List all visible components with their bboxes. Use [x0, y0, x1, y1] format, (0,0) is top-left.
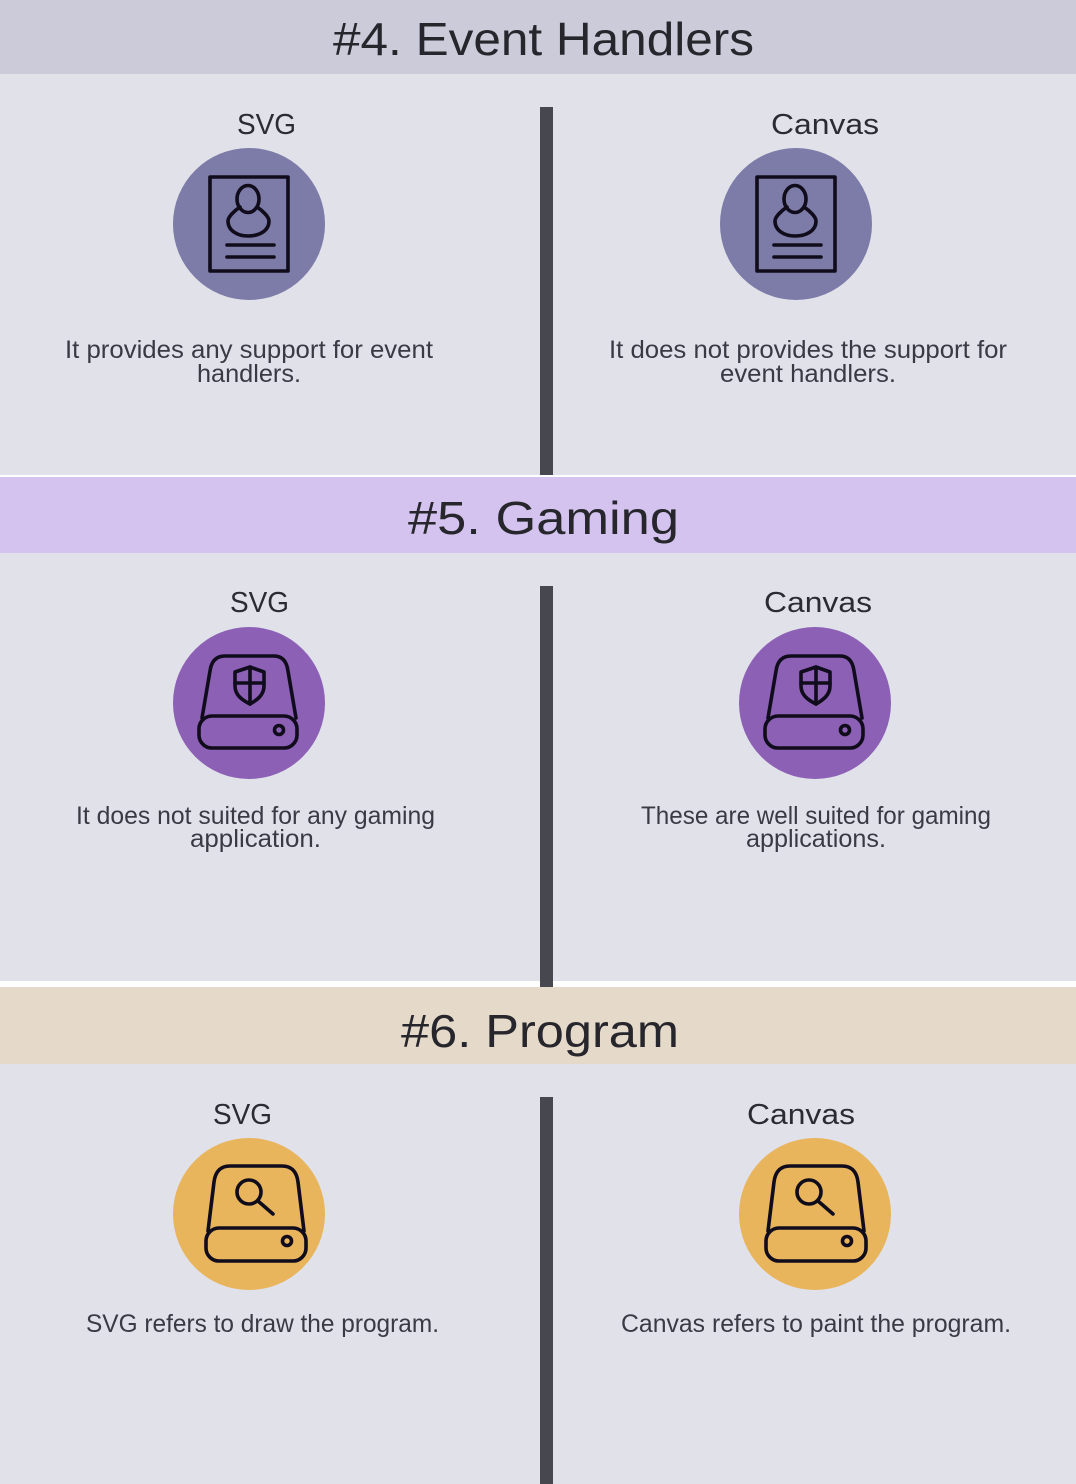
heading: #6. Program: #6. Program: [401, 1005, 679, 1057]
icon: shield drive, Canvas: [739, 627, 891, 779]
text: Canvas event handlers: It does not provides the support for: [609, 336, 1007, 364]
icon: shield drive, SVG: [173, 627, 325, 779]
label: Canvas: Canvas: [764, 587, 872, 619]
heading: #4. Event Handlers: #4. Event Handlers: [333, 13, 754, 65]
text: SVG gaming: application.: [190, 825, 321, 853]
heading: #5. Gaming: #5. Gaming: [408, 492, 679, 544]
section divider gaps: [0, 475, 1076, 987]
text: SVG event handlers: It provides any support for event: [65, 336, 433, 364]
label: SVG: SVG: [237, 109, 296, 141]
heading band: #4: [0, 0, 1076, 74]
column divider: [540, 586, 553, 987]
icon: search drive, Canvas: [739, 1138, 891, 1290]
panel: section 5 gaming: [0, 477, 1076, 987]
text: SVG program: SVG refers to draw the program.: [86, 1310, 439, 1338]
text: SVG event handlers: handlers.: [197, 360, 301, 388]
icon: profile document, SVG: [173, 148, 325, 300]
panel: section 6 program: [0, 987, 1076, 1484]
text: Canvas gaming: These are well suited for gaming: [641, 802, 991, 830]
column divider: [540, 1097, 553, 1484]
text: Canvas gaming: [641, 802, 991, 853]
label: SVG: SVG: [213, 1099, 272, 1131]
icon: search drive, SVG: [173, 1138, 325, 1290]
label: Canvas: Canvas: [771, 109, 879, 141]
panel: section 4 event handlers: [0, 0, 1076, 475]
text: SVG gaming: It does not suited for any gaming: [76, 802, 435, 830]
text: Canvas program: Canvas refers to paint the program.: [621, 1310, 1011, 1338]
text: SVG gaming: [76, 802, 435, 853]
text: SVG event handlers: [65, 336, 433, 388]
label: Canvas: Canvas: [747, 1099, 855, 1131]
column divider: [540, 107, 553, 475]
icon: profile document, Canvas: [720, 148, 872, 300]
heading band: #6: [0, 987, 1076, 1064]
label: SVG: SVG: [230, 587, 289, 619]
text: Canvas gaming: applications.: [746, 825, 886, 853]
text: Canvas event handlers: event handlers.: [720, 360, 896, 388]
text: Canvas event handlers: [609, 336, 1007, 388]
heading band: #5: [0, 477, 1076, 553]
